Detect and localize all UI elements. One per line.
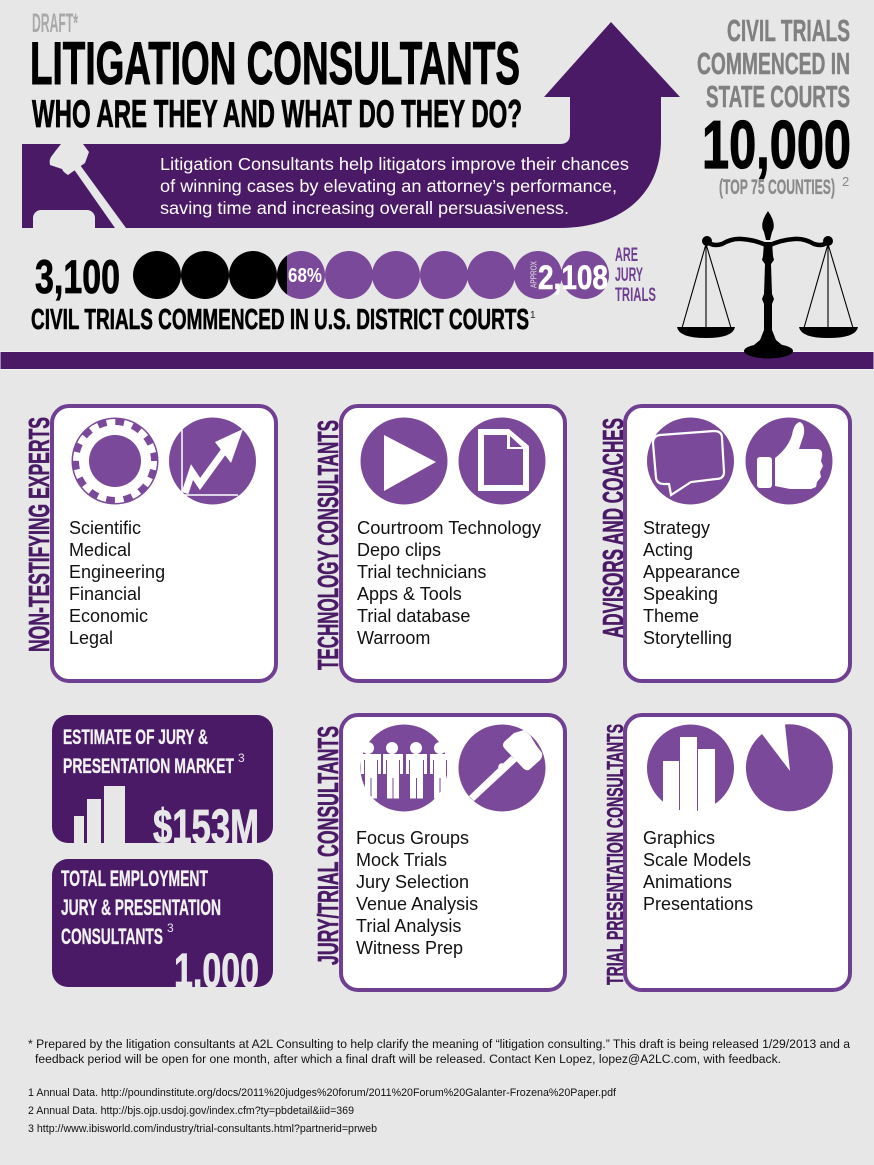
list: technology services: Courtroom Technology — [357, 518, 541, 538]
employment heading: TOTAL EMPLOYMENT — [61, 866, 208, 891]
state courts statistic — [697, 13, 851, 199]
district courts statistic — [31, 245, 656, 336]
purple divider band — [0, 352, 874, 370]
icon: document — [458, 418, 546, 504]
list: presentation services: Animations — [643, 872, 732, 892]
icon: gear — [72, 418, 158, 504]
panel frame — [52, 406, 276, 681]
icon: speech bubble — [647, 418, 734, 504]
approx label: APPROX — [530, 260, 538, 288]
panel: technology consultants — [341, 406, 565, 681]
list: technology services: Warroom — [357, 628, 430, 648]
panel frame — [625, 406, 850, 681]
list: expert types: Economic — [69, 606, 148, 626]
ten circle proportion chart — [133, 251, 609, 299]
list: advisor services: Strategy — [643, 518, 710, 538]
district courts caption: CIVIL TRIALS COMMENCED IN U.S. DISTRICT COURTS — [31, 304, 529, 336]
list: technology services: Depo clips — [357, 540, 441, 560]
list: technology services: Apps & Tools — [357, 584, 462, 604]
market heading: ESTIMATE OF JURY & — [63, 726, 208, 749]
panel: trial presentation consultants — [625, 715, 850, 990]
list: jury services: Mock Trials — [356, 850, 447, 870]
list: presentation services: Graphics — [643, 828, 715, 848]
state courts heading — [697, 13, 850, 114]
section label: technology consultants: TECHNOLOGY CONSULTANTS — [313, 420, 345, 670]
footer note — [28, 1037, 850, 1066]
list: advisor services: Acting — [643, 540, 693, 560]
footnote marker 2: 2 — [842, 174, 849, 189]
panel frame — [341, 715, 565, 990]
market value: $153M — [153, 801, 259, 854]
3,100 number: 3,100 — [35, 250, 120, 303]
list: presentation services — [643, 828, 753, 914]
list: expert types: Financial — [69, 584, 141, 604]
list: jury services: Venue Analysis — [356, 894, 478, 914]
subtitle: WHO ARE THEY AND WHAT DO THEY DO? — [32, 93, 522, 136]
icon: thumbs up — [746, 418, 832, 504]
main title: LITIGATION CONSULTANTS — [30, 30, 520, 97]
footnote references — [28, 1087, 617, 1135]
footnote marker 1: 1 — [530, 310, 536, 321]
callout: market estimate — [52, 715, 273, 854]
footnote references: 2 Annual Data. http://bjs.ojp.usdoj.gov/index.cfm?ty=pbdetail&iid=369 — [28, 1105, 354, 1117]
list: jury services: Focus Groups — [356, 828, 469, 848]
panel frame — [341, 406, 565, 681]
employment value: 1,000 — [174, 945, 259, 998]
market heading: PRESENTATION MARKET — [63, 755, 234, 778]
are jury trials label — [615, 245, 656, 306]
employment heading: CONSULTANTS — [61, 924, 163, 949]
banner text — [160, 154, 629, 218]
list: advisor services: Theme — [643, 606, 699, 626]
list: technology services: Trial technicians — [357, 562, 486, 582]
list: jury services — [356, 828, 478, 958]
68 percent label: 68% — [288, 265, 322, 287]
icon: gavel on banner — [33, 144, 126, 228]
2,108 number: 2,108 — [538, 259, 608, 297]
list: presentation services: Scale Models — [643, 850, 751, 870]
list: presentation services: Presentations — [643, 894, 753, 914]
panel: non-testifying experts — [52, 406, 276, 681]
arrow shape — [22, 22, 680, 228]
list: jury services: Witness Prep — [356, 938, 463, 958]
icon: gavel — [458, 724, 546, 812]
icon: presentation bars — [647, 724, 734, 813]
header title block — [30, 8, 522, 136]
section label: trial presentation consultants: TRIAL PRESENTATION CONSULTANTS — [602, 724, 628, 985]
market heading — [63, 726, 234, 778]
icon: scales of justice — [677, 211, 858, 358]
list: expert types: Medical — [69, 540, 131, 560]
icon: rising chart — [169, 418, 256, 504]
footer note: feedback period will be open for one month, after which a final draft will be released. Contact Ken Lopez, lopez@A2LC.com, with feedback. — [35, 1052, 781, 1066]
list: expert types: Engineering — [69, 562, 165, 582]
list: advisor services: Appearance — [643, 562, 740, 582]
employment heading — [61, 866, 221, 949]
list: expert types — [69, 518, 165, 648]
panel: advisors and coaches — [625, 406, 850, 681]
footnote references: 1 Annual Data. http://poundinstitute.org/docs/2011%20judges%20forum/2011%20Forum%20Galanter-Frozena%20Paper.pdf — [28, 1087, 617, 1099]
list: expert types: Scientific — [69, 518, 141, 538]
header title block: DRAFT* — [32, 8, 78, 38]
list: advisor services — [643, 518, 740, 648]
icon: bar chart — [74, 786, 125, 844]
footnote marker 3: 3 — [238, 751, 245, 765]
purple arrow banner — [22, 22, 680, 240]
box background — [52, 715, 273, 843]
list: advisor services: Storytelling — [643, 628, 732, 648]
callout: total employment — [52, 859, 273, 998]
are jury trials label: JURY — [615, 265, 643, 286]
list: jury services: Trial Analysis — [356, 916, 461, 936]
icon: group of people — [360, 724, 450, 812]
list: jury services: Jury Selection — [356, 872, 469, 892]
banner text: Litigation Consultants help litigators improve their chances — [160, 154, 629, 174]
section label: advisors and coaches: ADVISORS AND COACHES — [598, 418, 630, 638]
employment heading: JURY & PRESENTATION — [61, 895, 221, 920]
list: advisor services: Speaking — [643, 584, 718, 604]
panel: jury trial consultants — [341, 715, 565, 990]
list: expert types: Legal — [69, 628, 113, 648]
section label: non-testifying experts: NON-TESTIFYING EXPERTS — [24, 417, 56, 652]
icon: pie chart — [746, 724, 833, 811]
footnote references: 3 http://www.ibisworld.com/industry/trial-consultants.html?partnerid=prweb — [28, 1123, 377, 1135]
box background — [52, 859, 273, 987]
list: technology services — [357, 518, 541, 648]
footer note: * Prepared by the litigation consultants at A2L Consulting to help clarify the meaning of “litigation consulting.” This draft is being released 1/29/2013 and a — [28, 1037, 850, 1051]
icon: play button — [360, 418, 448, 504]
banner text: of winning cases by elevating an attorney’s performance, — [160, 176, 617, 196]
list: technology services: Trial database — [357, 606, 470, 626]
panel frame — [625, 715, 850, 990]
banner text: saving time and increasing overall persuasiveness. — [160, 198, 569, 218]
section label: jury trial consultants: JURY/TRIAL CONSULTANTS — [313, 726, 345, 965]
footnote marker 3: 3 — [167, 921, 174, 935]
are jury trials label: ARE — [615, 245, 638, 266]
are jury trials label: TRIALS — [615, 285, 656, 306]
